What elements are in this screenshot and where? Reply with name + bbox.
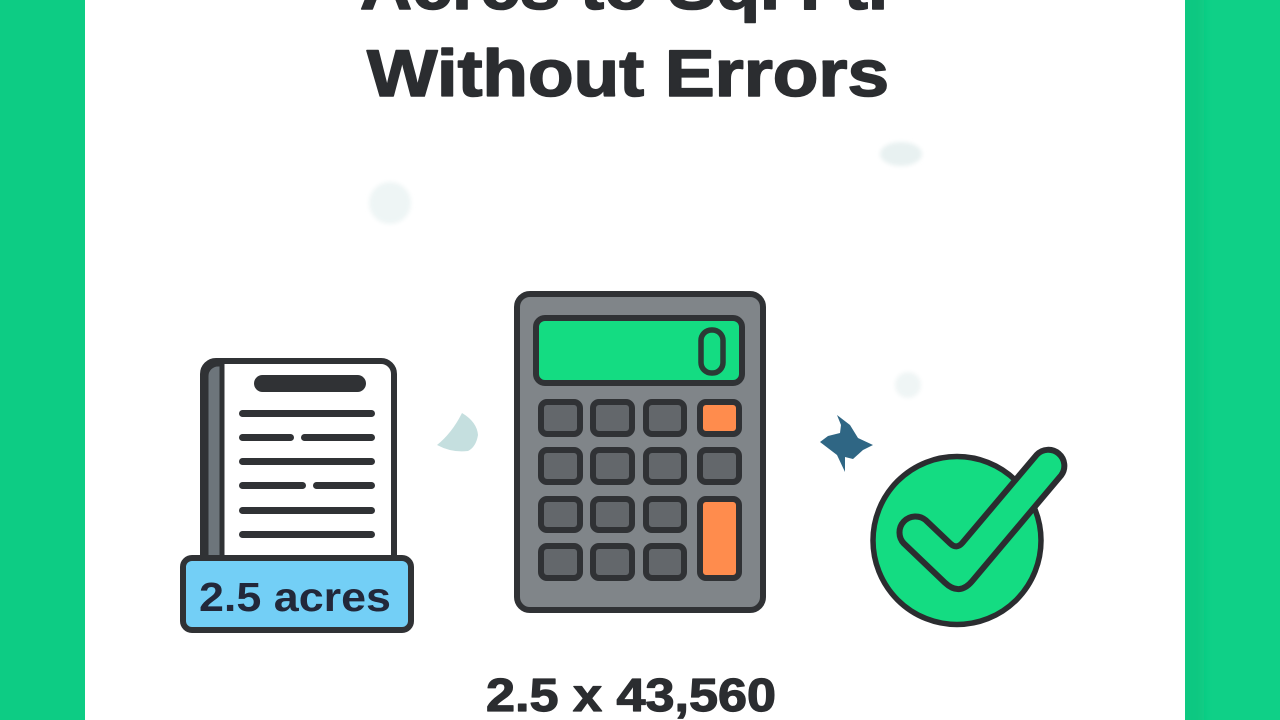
left green side bar <box>0 0 85 720</box>
title <box>360 0 889 110</box>
calculator display <box>536 318 742 383</box>
acres label <box>183 558 411 630</box>
display digit zero <box>701 330 723 373</box>
decorative teal shard <box>437 413 478 451</box>
formula text: 2.5 x 43,560 <box>486 669 776 720</box>
decorative faint blob: left <box>369 182 411 224</box>
title: Without Errors <box>367 36 889 110</box>
decorative faint blob: top right <box>880 142 922 166</box>
icon: calculator <box>517 294 763 610</box>
calculator body <box>517 294 763 610</box>
right green side bar <box>1180 0 1280 720</box>
acres label: 2.5 acres <box>199 574 391 620</box>
document text lines <box>239 375 375 538</box>
document page <box>203 361 394 571</box>
icon: green check mark <box>873 450 1064 624</box>
calculator keys <box>541 402 739 578</box>
decorative dark pinwheel <box>820 415 873 472</box>
decorative faint blob: right <box>895 372 921 398</box>
icon: document with acres label <box>183 361 411 630</box>
document spine <box>206 364 222 562</box>
